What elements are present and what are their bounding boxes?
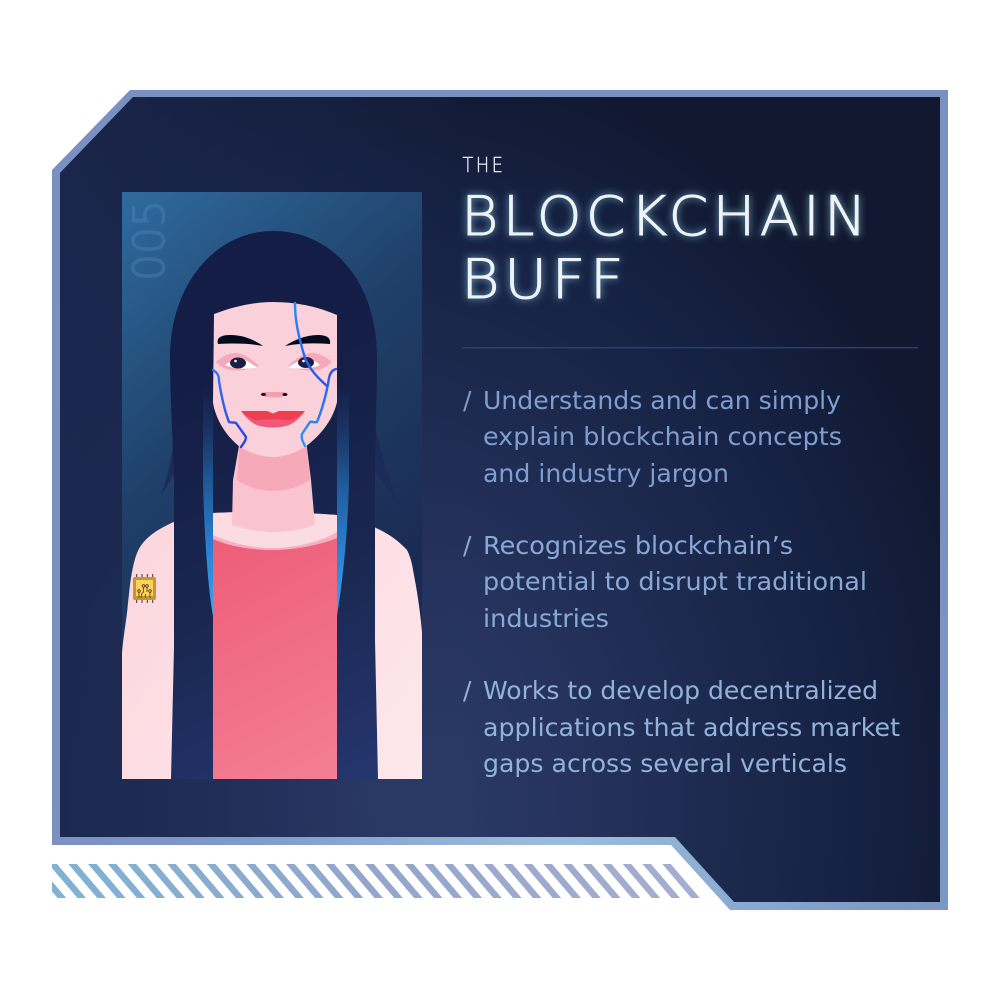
right eye — [288, 353, 332, 370]
bullet 2: industries — [483, 604, 609, 633]
bullet 1: and industry jargon — [483, 459, 729, 488]
heading: BLOCKCHAIN BUFF — [461, 184, 871, 311]
bullet 2: Recognizes blockchain’s — [483, 531, 793, 560]
lips — [241, 411, 305, 428]
decorative stripe band — [29, 864, 700, 898]
heading: BLOCKCHAIN BUFF: BUFF — [461, 247, 628, 311]
title — [461, 153, 871, 311]
hair — [170, 231, 378, 779]
portrait background — [122, 192, 422, 649]
bullet 3: / — [463, 676, 472, 705]
eyebrow: THE: THE — [462, 153, 506, 177]
neck — [232, 440, 315, 532]
bullet 1: / — [463, 386, 472, 415]
portrait of the blockchain buff — [122, 192, 422, 779]
blue hair highlights — [203, 385, 349, 616]
divider — [462, 347, 918, 348]
bullet 2 — [463, 531, 867, 633]
bullet 1: explain blockchain concepts — [483, 422, 842, 451]
heading: BLOCKCHAIN BUFF: BLOCKCHAIN — [461, 184, 871, 248]
icon: gold microchip on arm — [133, 574, 156, 603]
arms — [122, 521, 422, 779]
bullet 1 — [463, 386, 842, 488]
serial number 005: 005 — [125, 200, 175, 281]
face — [213, 302, 337, 457]
nose — [261, 392, 288, 398]
hair wisps — [162, 431, 384, 494]
left eyebrow — [218, 335, 263, 346]
shirt — [213, 530, 337, 779]
bullet 3: gaps across several verticals — [483, 749, 847, 778]
collar — [213, 512, 337, 550]
panel: chamfered frame — [52, 90, 948, 910]
bullet 2: / — [463, 531, 472, 560]
right eyebrow — [285, 335, 330, 346]
bullet 3: applications that address market — [483, 713, 900, 742]
bullet 1: Understands and can simply — [483, 386, 841, 415]
left eye — [216, 353, 259, 370]
bullet 3: Works to develop decentralized — [483, 676, 878, 705]
bullet 3 — [463, 676, 900, 778]
neck shadow — [237, 446, 310, 491]
bullet 2: potential to disrupt traditional — [483, 567, 867, 596]
circuit lines on face — [213, 303, 336, 447]
